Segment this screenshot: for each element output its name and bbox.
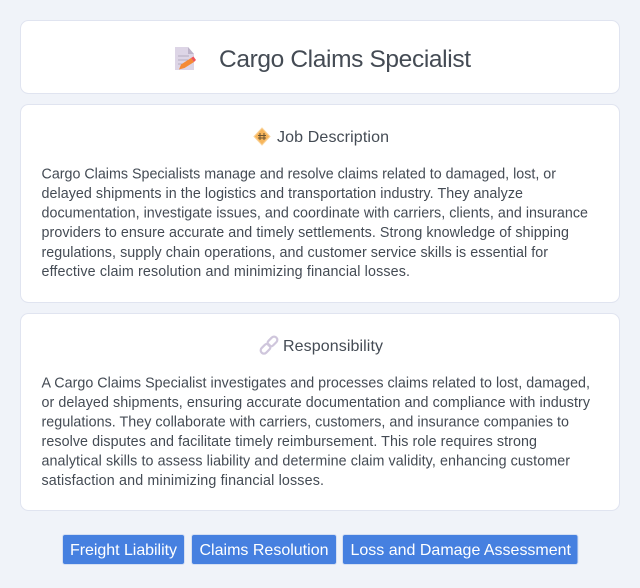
tag: freight liability: Freight Liability <box>70 542 177 559</box>
responsibility text <box>42 376 591 489</box>
tag: freight liability <box>62 534 184 564</box>
job description text: documentation, investigate issues, and coordinate with carriers, clients, and insurance <box>42 206 588 222</box>
job description text: providers to ensure accurate and timely settlements. Strong knowledge of shipping <box>42 225 569 241</box>
responsibility text: resolve disputes and facilitate timely reimbursement. This role requires strong <box>42 434 537 450</box>
job description text: regulations, supply chain operations, and customer service skills is essential for <box>42 245 548 261</box>
tag: loss and damage assessment: Loss and Damage Assessment <box>350 542 572 559</box>
panel: job description <box>20 104 620 302</box>
icon: document with pencil <box>175 47 196 70</box>
heading: responsibility: Responsibility <box>283 338 383 355</box>
tag: claims resolution: Claims Resolution <box>200 542 328 559</box>
responsibility text: or delayed shipments, ensuring accurate documentation and compliance with industry <box>42 395 591 411</box>
tag: claims resolution <box>192 534 336 564</box>
icon: chain link <box>259 335 279 355</box>
icon: road sign diamond <box>254 128 270 145</box>
responsibility text: analytical skills to assess liability and determine claim validity, enhancing customer <box>42 454 570 470</box>
responsibility text: satisfaction and minimizing financial losses. <box>42 473 324 489</box>
panel: title <box>20 20 620 94</box>
tag: loss and damage assessment <box>342 534 578 564</box>
job description text: Cargo Claims Specialists manage and resolve claims related to damaged, lost, or <box>42 166 556 182</box>
job description text <box>42 166 588 280</box>
responsibility text: A Cargo Claims Specialist investigates and processes claims related to lost, damaged, <box>42 376 590 392</box>
job description text: effective claim resolution and minimizing financial losses. <box>42 264 410 280</box>
job description text: delayed shipments in the logistics and transportation industry. They analyze <box>42 186 523 202</box>
responsibility text: regulations. They collaborate with carriers, customers, and insurance companies to <box>42 414 569 430</box>
heading: job description: Job Description <box>277 129 389 146</box>
panel: responsibility <box>20 314 620 510</box>
title text: Cargo Claims Specialist <box>219 46 471 73</box>
